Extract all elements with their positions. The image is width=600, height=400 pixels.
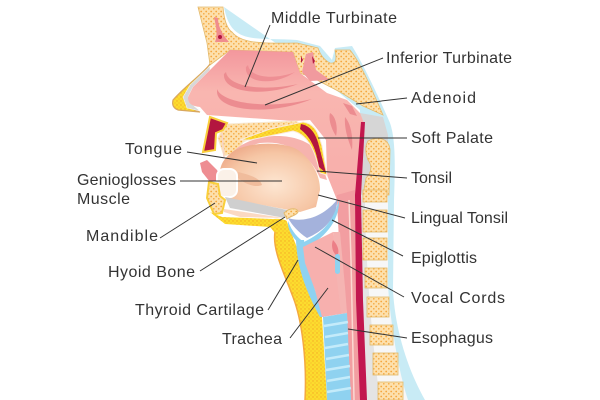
- vertebrae: [363, 190, 403, 400]
- leader lines: [160, 25, 407, 338]
- epiglottis: [288, 200, 337, 238]
- skull bone: [198, 7, 383, 115]
- vertebra blob at skull base: [363, 138, 390, 195]
- label: Inferior Turbinate: Inferior Turbinate: [386, 50, 512, 67]
- label: Soft Palate: Soft Palate: [411, 130, 493, 147]
- label: Genioglosses Muscle: Muscle: [77, 191, 130, 208]
- larynx side strip: [333, 232, 347, 313]
- inferior turbinate: [217, 89, 312, 110]
- nose outer cartilage: [173, 64, 210, 112]
- label: Thyroid Cartilage: Thyroid Cartilage: [135, 302, 264, 319]
- soft palate underlayer: [235, 136, 327, 180]
- anatomy illustration: [173, 7, 425, 400]
- thyroid cartilage: [296, 240, 324, 317]
- larynx: [303, 232, 347, 317]
- label: Tongue: Tongue: [125, 141, 182, 158]
- upper jaw red: [203, 117, 227, 152]
- white discs: [365, 195, 408, 400]
- tongue: [220, 144, 320, 212]
- top fold: [246, 65, 295, 81]
- esophagus strip: [355, 122, 367, 400]
- label: Adenoid: Adenoid: [411, 90, 476, 107]
- nose grey cartilage: [183, 66, 210, 111]
- throat pink column: [337, 190, 360, 400]
- nasal cavity and pharynx: [188, 50, 364, 400]
- sphenoid sinus: [302, 52, 330, 81]
- label: Vocal Cords: Vocal Cords: [411, 290, 505, 307]
- label: Tonsil: Tonsil: [411, 170, 452, 187]
- vocal cords: [332, 240, 338, 256]
- trachea: [323, 313, 351, 400]
- label: Epiglottis: Epiglottis: [411, 250, 477, 267]
- sinus dot: [218, 35, 222, 39]
- genioglossus shading: [238, 172, 262, 186]
- lower tooth: [217, 169, 237, 197]
- label: Lingual Tonsil: Lingual Tonsil: [411, 210, 508, 227]
- label: Genioglosses Muscle: [77, 172, 176, 208]
- hard palate bone: [218, 121, 302, 156]
- middle turbinate: [224, 72, 298, 92]
- hyoid bone: [284, 209, 298, 219]
- label: Genioglosses Muscle: Genioglosses: [77, 172, 176, 189]
- label: Hyoid Bone: Hyoid Bone: [108, 264, 195, 281]
- neck fat: [210, 212, 327, 400]
- mandible: [207, 182, 225, 214]
- grey spinal membrane: [360, 113, 388, 195]
- soft palate red: [300, 124, 326, 173]
- frontal sinus: [214, 17, 229, 42]
- label: Mandible: Mandible: [86, 228, 158, 245]
- vertebral column membrane: [358, 195, 404, 400]
- lip: [200, 160, 222, 182]
- incisive slit: [222, 133, 224, 157]
- floor of mouth muscle: [225, 197, 287, 218]
- adenoid folds: [329, 103, 357, 150]
- skin outline: blue back of head and neck: [224, 7, 425, 400]
- label: Esophagus: Esophagus: [411, 330, 493, 347]
- soft palate yellow: [240, 122, 327, 175]
- label: Trachea: Trachea: [222, 331, 282, 348]
- label: Middle Turbinate: Middle Turbinate: [271, 10, 397, 27]
